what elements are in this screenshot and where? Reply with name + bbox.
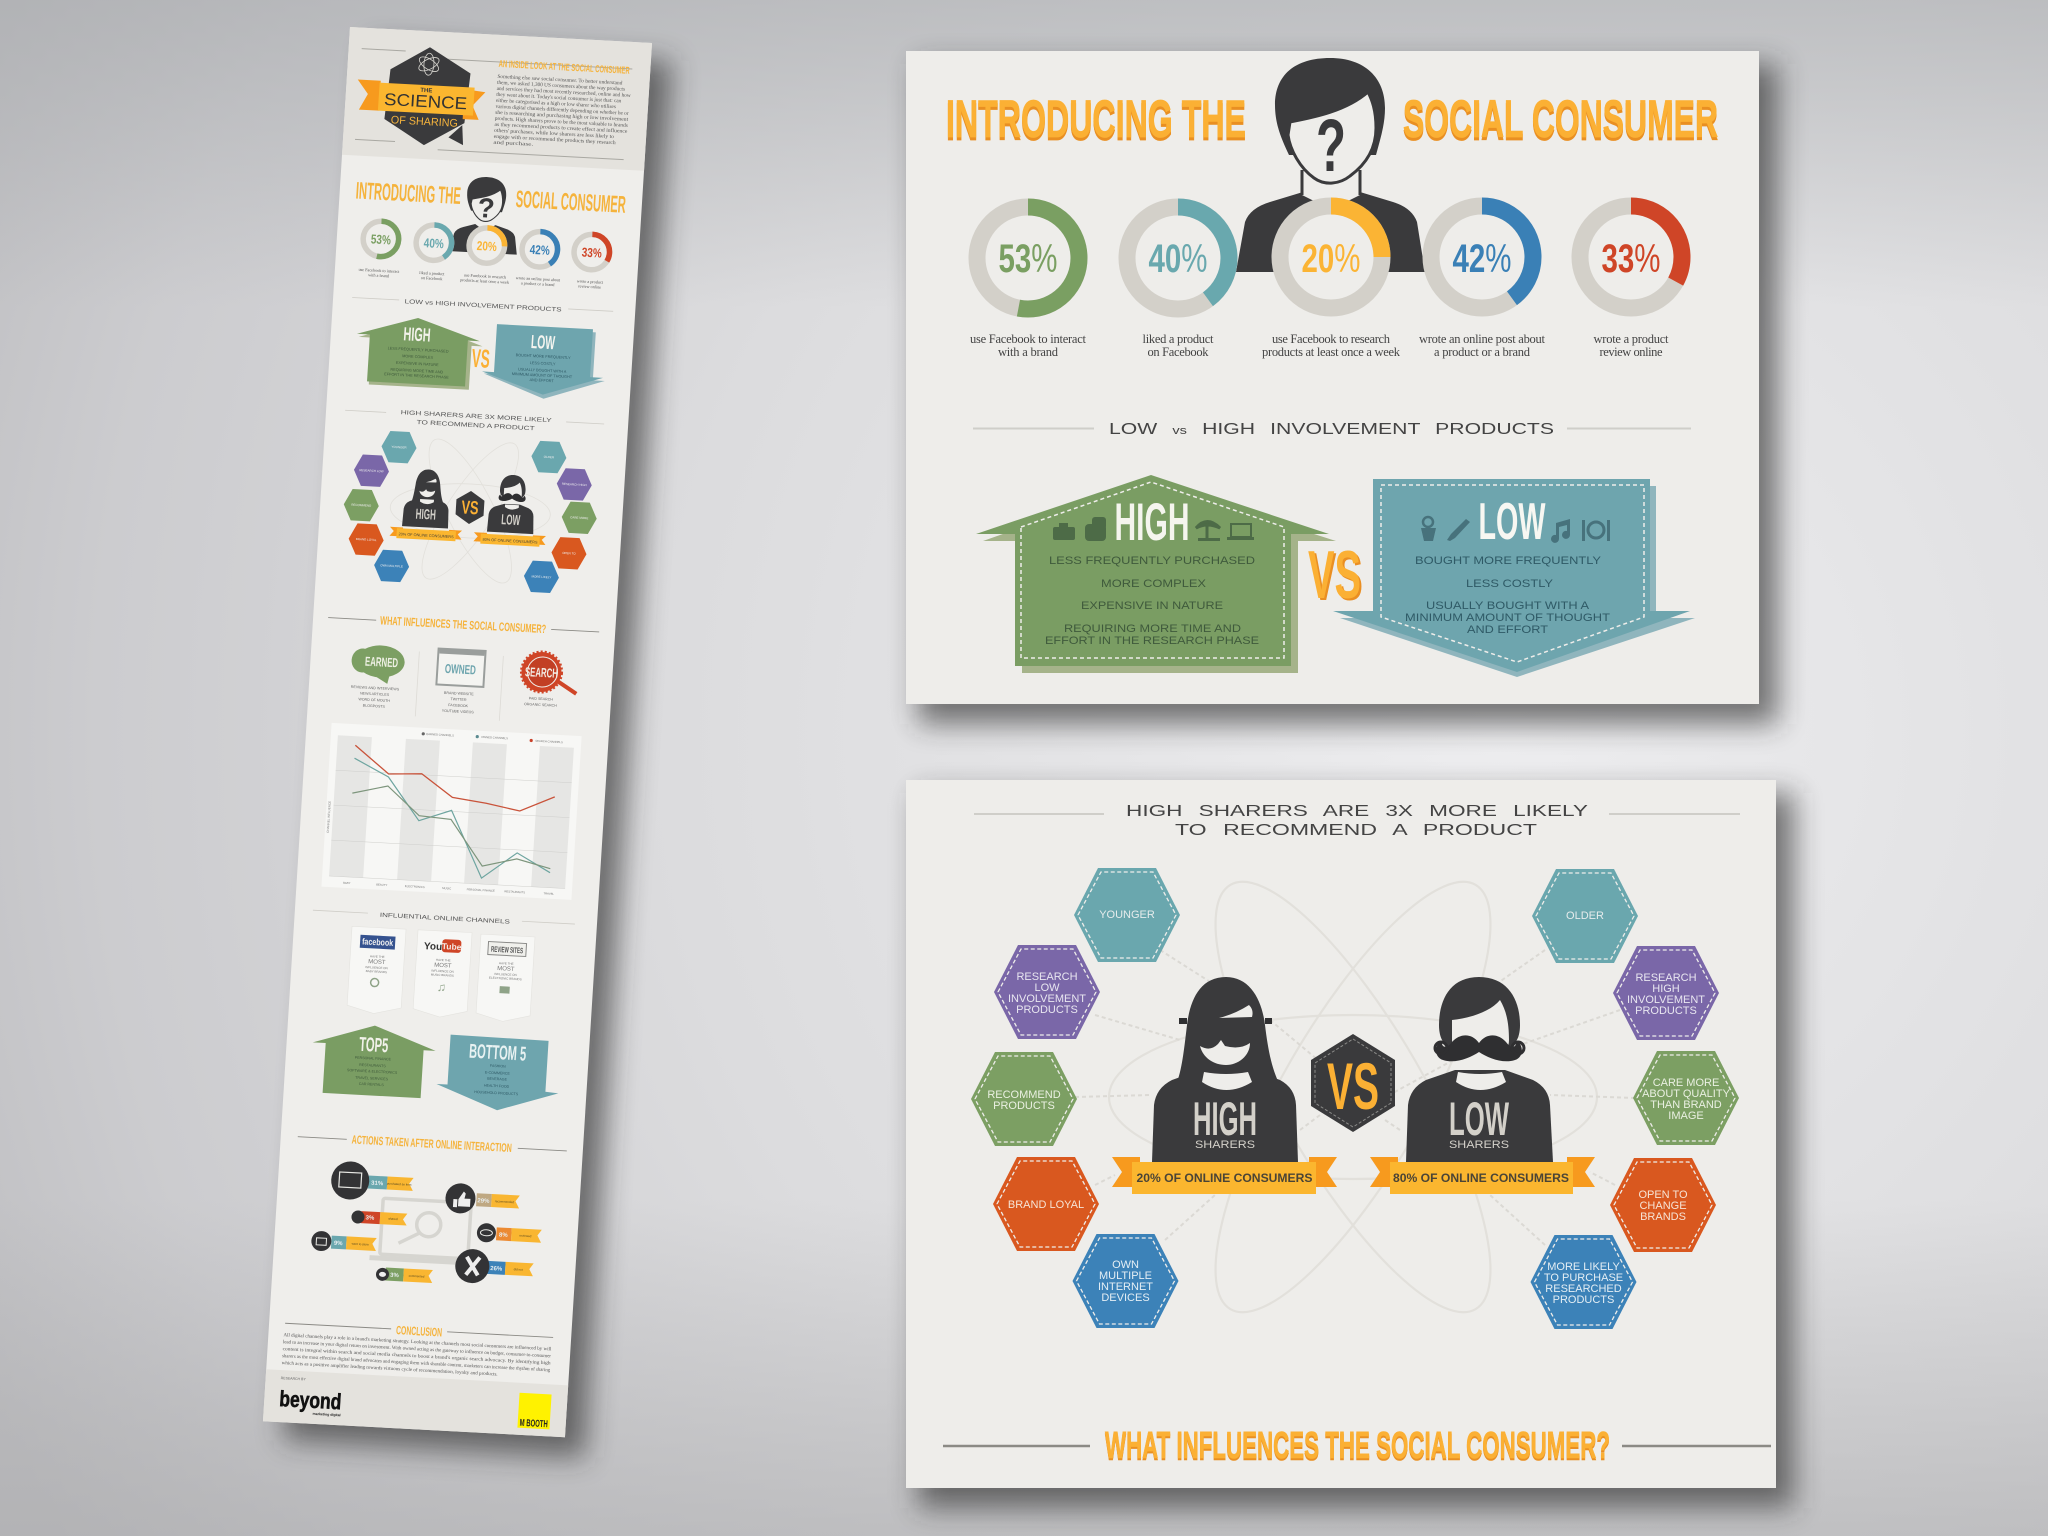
heading: high sharers xyxy=(1126,803,1588,839)
panel shadows xyxy=(283,45,1794,1508)
channel card: youtube: Tube xyxy=(441,941,462,952)
line chart: MUSIC xyxy=(442,886,451,890)
high arrow: EXPENSIVE IN NATURE xyxy=(396,361,439,367)
stat: 53%: use Facebook to interact xyxy=(970,332,1087,346)
conclusion paragraph: lead to an increase in your digital return on investment. With owned acting as the gateway to influence on budget, consumer-to-consumer xyxy=(283,1340,551,1359)
hexagon: care more about quality xyxy=(1633,1051,1739,1145)
stat: 40%: on Facebook xyxy=(1148,345,1209,359)
high attributes: EXPENSIVE IN NATURE xyxy=(1081,600,1223,612)
line chart: BEAUTY xyxy=(376,883,388,887)
hexagon: research low involvement: LOW xyxy=(1034,982,1060,994)
percent ribbons: 80% OF ONLINE CONSUMERS xyxy=(482,538,538,545)
figure: low sharer xyxy=(487,474,537,534)
heading: social consumer: SOCIAL CONSUMER xyxy=(1403,90,1718,149)
owned icon: BRAND WEBSITE xyxy=(444,691,474,696)
figure: faceless consumer: ? xyxy=(1316,104,1346,187)
channel card: review sites: REVIEW SITES xyxy=(491,945,524,955)
line chart: PERSONAL FINANCE xyxy=(467,887,495,893)
hexagon: older: OLDER xyxy=(1566,910,1604,922)
action tags: went to store xyxy=(352,1242,369,1247)
hexagon: research high involvement: PRODUCTS xyxy=(1635,1005,1697,1017)
hexagon: care more about quality: THAN BRAND xyxy=(1650,1099,1722,1111)
search icon: ORGANIC SEARCH xyxy=(524,702,557,708)
hexagon: research low involvement: RESEARCH xyxy=(1016,971,1078,983)
intro paragraph: engage with or recommend the products they research xyxy=(493,134,616,146)
vs: VS xyxy=(1308,537,1361,613)
stat: 33%: 33% xyxy=(1602,237,1660,281)
bottom 5 arrow: HEALTH FOOD xyxy=(484,1083,510,1089)
sharer hexagons: YOUNGER xyxy=(391,445,408,450)
stat: 40%: liked a product xyxy=(1142,332,1214,346)
action tags: 3% xyxy=(390,1273,400,1279)
ribbon: 80% of online consumers xyxy=(1370,1157,1595,1194)
high arrow: LESS FREQUENTLY PURCHASED xyxy=(388,346,449,354)
sharer hexagons: OWN MULTIPLE xyxy=(380,563,403,568)
stat: 33% xyxy=(1580,206,1682,359)
bottom 5 arrow: BOTTOM 5 xyxy=(468,1041,527,1066)
line chart: SEARCH CHANNELS xyxy=(535,739,563,744)
sharer hexagons: CARE MORE xyxy=(570,515,588,520)
action tags: commented xyxy=(409,1274,425,1279)
figure: high sharer: SHARERS xyxy=(1195,1139,1255,1151)
figure: social consumer xyxy=(450,175,521,255)
product icons: low xyxy=(1421,517,1610,543)
top 5 arrow: PERSONAL FINANCE xyxy=(355,1056,392,1062)
line chart xyxy=(321,723,582,900)
channel card: facebook: BABY BRANDS xyxy=(366,969,387,974)
vs badge: VS xyxy=(461,498,479,519)
stat: 42%: a product or a brand xyxy=(1434,345,1531,359)
low arrow: AND EFFORT xyxy=(529,378,555,383)
intro paragraph: she is researching and purchasing high or low involvement xyxy=(495,110,629,123)
action tags: 9% xyxy=(334,1241,343,1247)
hexagon: recommend products: PRODUCTS xyxy=(993,1100,1055,1112)
hexagon: open to change brands xyxy=(1610,1158,1716,1252)
panel: full infographic thumbnail: 40% xyxy=(423,235,445,251)
hexagon: research high involvement xyxy=(1613,946,1719,1040)
hexagon: research low involvement xyxy=(994,945,1100,1039)
stat: 42% xyxy=(1419,206,1546,359)
logo: booth xyxy=(517,1393,552,1430)
action tags: reviewed xyxy=(519,1234,532,1238)
action tags xyxy=(329,1174,545,1289)
low arrow: LOW xyxy=(530,332,556,354)
panel: introducing the social consumer xyxy=(906,51,1759,704)
hexagon: more likely to purchase: MORE LIKELY xyxy=(1547,1261,1620,1273)
logo: beyond: marketing digital xyxy=(312,1412,341,1417)
hexagon: own multiple devices: INTERNET xyxy=(1098,1281,1153,1293)
conclusion paragraph: All digital channels play a role in a brand's marketing strategy. Looking at the channels most social consumers are influenced by will xyxy=(283,1333,552,1352)
high arrow: REQUIRING MORE TIME AND xyxy=(390,368,444,374)
hexagon: brand loyal: BRAND LOYAL xyxy=(1008,1199,1084,1211)
product icons: high xyxy=(1053,517,1254,541)
hexagon: open to change brands: OPEN TO xyxy=(1638,1189,1688,1201)
figure: low sharer xyxy=(1406,977,1553,1162)
channel card: review sites: HAVE THE xyxy=(499,961,514,966)
hexagon: more likely to purchase: RESEARCHED xyxy=(1545,1283,1622,1295)
panel: full infographic thumbnail: 42% xyxy=(529,242,551,258)
earned icon: EARNED xyxy=(365,654,399,670)
science of sharing badge: SCIENCE xyxy=(384,90,468,113)
earned icon xyxy=(349,644,406,710)
title: high: HIGH xyxy=(1114,493,1190,552)
high arrow: MORE COMPLEX xyxy=(402,354,434,360)
channel card: youtube xyxy=(413,930,472,1018)
channel card: facebook: HAVE THE xyxy=(370,954,385,959)
top 5 arrow: SOFTWARE & ELECTRONICS xyxy=(347,1068,398,1075)
sharer hexagons: RECOMMEND xyxy=(351,503,372,508)
heading: conclusion: CONCLUSION xyxy=(396,1323,443,1340)
line chart: CHANNEL INFLUENCE xyxy=(326,801,332,833)
stat: 42%: 42% xyxy=(1452,237,1512,281)
ribbon: 20% of online consumers: 20% OF ONLINE CONSUMERS xyxy=(1136,1173,1313,1185)
hexagon: research high involvement: INVOLVEMENT xyxy=(1627,994,1705,1006)
search icon: PAID SEARCH xyxy=(529,696,553,702)
intro paragraph: various digital channels differently depending on whether he or xyxy=(495,103,629,117)
line chart: BABY xyxy=(343,881,351,885)
logo: booth: M BOOTH xyxy=(519,1418,548,1430)
channel card: youtube: HAVE THE xyxy=(436,958,451,963)
figure: social consumer: ? xyxy=(477,192,496,224)
figure: faceless consumer xyxy=(1236,58,1425,272)
conclusion paragraph: which acts as a positive amplifier leading towards virtuous cycle of recommendation, loyalty and products. xyxy=(281,1361,498,1378)
panel: full infographic thumbnail: wrote a product xyxy=(577,278,604,285)
action icons xyxy=(309,1160,500,1287)
low arrow xyxy=(481,324,608,402)
panel: full infographic thumbnail: review online xyxy=(578,283,601,290)
percent ribbons xyxy=(389,527,546,547)
sharer hexagons: RESEARCH HIGH xyxy=(562,482,587,487)
label: low sharers: LOW xyxy=(1449,1092,1509,1145)
science of sharing badge xyxy=(354,44,488,148)
figure: high sharer xyxy=(1152,977,1298,1162)
top 5 arrow: TOP5 xyxy=(359,1034,389,1057)
top 5 arrow xyxy=(310,1022,437,1099)
atom orbit xyxy=(1109,849,1597,1345)
heading: low vs high: LOW vs HIGH INVOLVEMENT PRODUCTS xyxy=(404,299,562,314)
intro paragraph: and purchase. xyxy=(493,140,533,148)
stat: 20%: use Facebook to research xyxy=(1272,332,1391,346)
panel: full infographic thumbnail: SOCIAL CONSUMER xyxy=(515,186,627,219)
low arrow: LESS COSTLY xyxy=(530,361,556,366)
stat: 20%: 20% xyxy=(1302,237,1360,281)
ribbon: 80% of online consumers: 80% OF ONLINE CONSUMERS xyxy=(1393,1173,1569,1185)
bottom 5 arrow: BEVERAGE xyxy=(487,1077,508,1082)
low arrow: USUALLY BOUGHT WITH A xyxy=(518,367,567,374)
intro paragraph: others' purchases, while low sharers are less likely to xyxy=(494,128,615,140)
hexagon: own multiple devices: OWN xyxy=(1112,1259,1139,1271)
stat rings xyxy=(362,220,611,271)
stat: 20% xyxy=(1262,206,1401,359)
panel: full infographic thumbnail: products at least once a week xyxy=(460,277,510,285)
channel card: review sites: MOST xyxy=(497,966,515,973)
action tags: 26% xyxy=(490,1266,503,1273)
intro paragraph: Something else saw social consumer. To better understand xyxy=(497,74,623,87)
header rules xyxy=(355,49,633,160)
action tags: 31% xyxy=(371,1181,384,1187)
intro paragraph: them, we asked 1,300 US consumers about the way products xyxy=(497,80,625,93)
line chart: EARNED CHANNELS xyxy=(426,732,454,737)
sharer hexagons: MORE LIKELY xyxy=(531,574,551,579)
figure: high sharer: HIGH xyxy=(415,507,436,524)
action tags: did not xyxy=(514,1267,523,1272)
atom xyxy=(385,426,555,596)
heading: high sharers: HIGH SHARERS ARE 3X MORE LIKELY xyxy=(400,410,552,424)
stat: 53%: with a brand xyxy=(998,345,1059,359)
low attributes: BOUGHT MORE FREQUENTLY xyxy=(1415,555,1602,567)
vs badge: VS xyxy=(1327,1049,1379,1123)
conclusion paragraph xyxy=(281,1333,552,1380)
earned icon: WORD OF MOUTH xyxy=(358,697,390,703)
sharer hexagons: OPEN TO xyxy=(562,551,576,556)
sharer hexagons: BRAND LOYAL xyxy=(356,537,377,542)
heading: high sharers: TO RECOMMEND A PRODUCT xyxy=(416,420,535,432)
high attributes: REQUIRING MORE TIME AND xyxy=(1064,623,1241,635)
owned icon: OWNED xyxy=(444,661,476,677)
hexagon: more likely to purchase: PRODUCTS xyxy=(1553,1294,1614,1306)
hexagon: older xyxy=(1532,869,1638,963)
heading: high sharers: HIGH SHARERS ARE 3X MORE LIKELY xyxy=(1126,803,1588,820)
connectors xyxy=(1075,950,1635,1245)
hexagon: care more about quality: CARE MORE xyxy=(1653,1077,1719,1089)
panel: full infographic thumbnail: 33% xyxy=(581,245,603,261)
owned icon xyxy=(435,648,486,715)
high attributes: MORE COMPLEX xyxy=(1101,578,1207,590)
bottom 5 arrow: HOUSEHOLD PRODUCTS xyxy=(474,1090,519,1096)
top 5 arrow: CAR RENTALS xyxy=(359,1082,384,1087)
vs badge xyxy=(455,490,485,525)
conclusion paragraph: sharers as the most effective digital brand advocates and engaging them with sharable content, marketers can increase the rhythm of sharing xyxy=(282,1354,551,1373)
intro paragraph: either be categorised as a high or low sharer who utilises xyxy=(496,98,616,110)
top 5 arrow: RESTAURANTS xyxy=(359,1063,386,1068)
channel card: facebook: MOST xyxy=(368,959,386,966)
sharer hexagons xyxy=(339,429,601,595)
high arrow: EFFORT IN THE RESEARCH PHASE xyxy=(384,372,449,380)
panel: full infographic thumbnail: a product or a brand xyxy=(521,280,556,287)
channel card: facebook: INFLUENCE ON xyxy=(365,965,388,970)
heading: high sharers xyxy=(400,410,552,433)
hexagon: open to change brands: BRANDS xyxy=(1640,1211,1686,1223)
bottom 5 arrow: E-COMMERCE xyxy=(485,1071,511,1076)
channel card: youtube: MUSIC BRANDS xyxy=(431,973,454,978)
stat: 42%: wrote an online post about xyxy=(1419,332,1546,346)
intro paragraph: they went about it. Today's social consumer is just that: can xyxy=(496,92,622,104)
intro paragraph: and services they had most recently researched, online and how xyxy=(496,86,631,99)
line chart: TRAVEL xyxy=(543,891,555,896)
hexagon: research low involvement: PRODUCTS xyxy=(1016,1004,1078,1016)
hexagon: research low involvement: INVOLVEMENT xyxy=(1008,993,1086,1005)
channel card: facebook xyxy=(347,926,406,1015)
hexagon: research high involvement: HIGH xyxy=(1652,983,1680,995)
low attributes xyxy=(1405,555,1610,636)
mustache curls xyxy=(1435,1042,1524,1054)
heading: introducing the: INTRODUCING THE xyxy=(946,90,1246,149)
high arrow xyxy=(354,315,484,390)
intro paragraph: products. High sharers prove to be the most valuable to brands xyxy=(495,116,628,129)
hexagon: younger: YOUNGER xyxy=(1099,909,1155,921)
footer: research by: RESEARCH BY xyxy=(281,1376,307,1381)
earned icon: REVIEWS AND INTERVIEWS xyxy=(351,685,400,691)
figure: low sharer: SHARERS xyxy=(1449,1139,1509,1151)
stat: 33%: review online xyxy=(1600,345,1663,359)
channel card: youtube: INFLUENCE ON xyxy=(431,969,454,974)
channel card: youtube: ♫ xyxy=(437,980,446,994)
stat: 33%: wrote a product xyxy=(1594,332,1669,346)
hexagon: recommend products xyxy=(971,1052,1077,1146)
stat: 53% xyxy=(970,207,1087,359)
stat: 20%: products at least once a week xyxy=(1262,345,1401,359)
low attributes: USUALLY BOUGHT WITH A xyxy=(1426,600,1590,612)
heading: influential channels: INFLUENTIAL ONLINE CHANNELS xyxy=(380,913,510,926)
channel card: review sites: ELECTRONIC BRANDS xyxy=(489,976,522,981)
ribbon: 20% of online consumers xyxy=(1112,1157,1337,1194)
title: low: LOW xyxy=(1478,493,1546,551)
hexagon: own multiple devices xyxy=(1072,1234,1178,1328)
line chart: OWNED CHANNELS xyxy=(481,735,508,740)
label: high sharers: HIGH xyxy=(1193,1092,1257,1145)
action tags: 29% xyxy=(477,1198,490,1205)
hexagon: recommend products: RECOMMEND xyxy=(987,1089,1061,1101)
low arrow: BOUGHT MORE FREQUENTLY xyxy=(516,353,571,360)
high arrow: HIGH xyxy=(403,324,431,347)
hexagon: more likely to purchase: TO PURCHASE xyxy=(1544,1272,1623,1284)
vs badge xyxy=(1311,1034,1395,1132)
low involvement arrow xyxy=(1333,479,1695,677)
heading: low vs high involvement products: LOW vs HIGH INVOLVEMENT PRODUCTS xyxy=(1109,421,1554,438)
panel: full infographic thumbnail: use Facebook to interact xyxy=(358,267,400,274)
low attributes: LESS COSTLY xyxy=(1466,578,1554,590)
action tags: purchased an item xyxy=(387,1181,412,1187)
hexagon: own multiple devices: MULTIPLE xyxy=(1099,1270,1152,1282)
panel: full infographic thumbnail xyxy=(263,27,652,1437)
action tags: shared xyxy=(388,1217,398,1221)
hexagon: care more about quality: ABOUT QUALITY xyxy=(1642,1088,1731,1100)
panel: full infographic thumbnail: use Facebook to research xyxy=(464,272,507,280)
line chart: RESTAURANTS xyxy=(504,889,525,894)
action tags: recommended xyxy=(495,1199,514,1204)
vs: VS xyxy=(471,343,491,374)
bottom 5 arrow xyxy=(435,1034,562,1113)
heading: high sharers: TO RECOMMEND A PRODUCT xyxy=(1175,822,1537,839)
panel: full infographic thumbnail: 20% xyxy=(476,238,498,254)
panel: full infographic thumbnail: 53% xyxy=(370,231,392,247)
hexagon: open to change brands: CHANGE xyxy=(1639,1200,1687,1212)
logo: beyond: beyond xyxy=(279,1386,342,1414)
hexagon: brand loyal xyxy=(993,1157,1099,1251)
high attributes: LESS FREQUENTLY PURCHASED xyxy=(1049,555,1255,567)
panel: full infographic thumbnail: wrote an online post about xyxy=(516,275,561,282)
top 5 arrow: TRAVEL SERVICES xyxy=(355,1076,389,1081)
intro paragraph xyxy=(493,74,632,153)
intro paragraph: as they recommend products to create effect and influence xyxy=(494,121,628,135)
low attributes: AND EFFORT xyxy=(1467,624,1548,636)
high attributes xyxy=(1045,555,1259,647)
search icon xyxy=(519,651,579,709)
sharer hexagons: OLDER xyxy=(544,455,555,459)
channel card: youtube: You xyxy=(424,941,442,953)
owned icon: YOUTUBE VIDEOS xyxy=(442,709,474,714)
laptop xyxy=(369,1198,481,1263)
intro title: AN INSIDE LOOK AT THE SOCIAL CONSUMER xyxy=(498,59,630,77)
channel card: review sites: INFLUENCE ON xyxy=(494,972,517,977)
stat: 40% xyxy=(1127,207,1229,359)
panel: high vs low sharers xyxy=(906,780,1776,1488)
panel: full infographic thumbnail: liked a product xyxy=(419,270,445,276)
earned icon: NEWS ARTICLES xyxy=(360,691,390,697)
sharer hexagons: RESEARCH LOW xyxy=(359,468,384,473)
channel card: youtube: MOST xyxy=(434,963,452,970)
panel: full infographic thumbnail: on Facebook xyxy=(421,275,443,281)
owned icon: FACEBOOK xyxy=(448,703,469,708)
hexagon: more likely to purchase xyxy=(1530,1235,1636,1329)
stat: 40%: 40% xyxy=(1148,237,1208,281)
heading: actions taken: ACTIONS TAKEN AFTER ONLINE INTERACTION xyxy=(351,1133,512,1155)
panel: full infographic thumbnail: INTRODUCING THE xyxy=(355,178,462,210)
action tags: 8% xyxy=(499,1232,508,1239)
stat: 53%: 53% xyxy=(998,237,1058,281)
search icon: SEARCH xyxy=(525,664,558,681)
channel card: facebook: facebook xyxy=(362,936,394,948)
action tags: 3% xyxy=(365,1215,375,1222)
bottom 5 arrow: FASHION xyxy=(490,1064,506,1069)
science of sharing badge: THE xyxy=(420,88,432,94)
hexagon: care more about quality: IMAGE xyxy=(1668,1110,1704,1122)
hexagon: younger xyxy=(1074,868,1180,962)
earned icon: BLOGPOSTS xyxy=(363,704,386,709)
hexagon: research high involvement: RESEARCH xyxy=(1635,972,1697,984)
low attributes: MINIMUM AMOUNT OF THOUGHT xyxy=(1405,612,1610,624)
conclusion paragraph: content is integral within search and social media channels to boost a brand's organic search advocacy. By identifying high xyxy=(282,1347,551,1366)
panel: full infographic thumbnail: with a brand xyxy=(368,272,390,278)
high involvement arrow xyxy=(976,475,1336,673)
low arrow: MINIMUM AMOUNT OF THOUGHT xyxy=(512,372,573,379)
figure: high sharer xyxy=(402,468,452,529)
heading: what influences: WHAT INFLUENCES THE SOCIAL CONSUMER? xyxy=(380,613,547,636)
heading: what influences the social consumer: WHAT INFLUENCES THE SOCIAL CONSUMER? xyxy=(1105,1425,1610,1467)
channel card: review sites xyxy=(476,934,535,1023)
figure: low sharer: LOW xyxy=(501,512,521,529)
percent ribbons: 20% OF ONLINE CONSUMERS xyxy=(398,532,454,539)
owned icon: TWITTER xyxy=(450,697,467,702)
line chart: ELECTRONICS xyxy=(405,884,425,889)
high attributes: EFFORT IN THE RESEARCH PHASE xyxy=(1045,635,1259,647)
science of sharing badge: OF SHARING xyxy=(390,114,458,130)
hexagon: own multiple devices: DEVICES xyxy=(1101,1292,1150,1304)
